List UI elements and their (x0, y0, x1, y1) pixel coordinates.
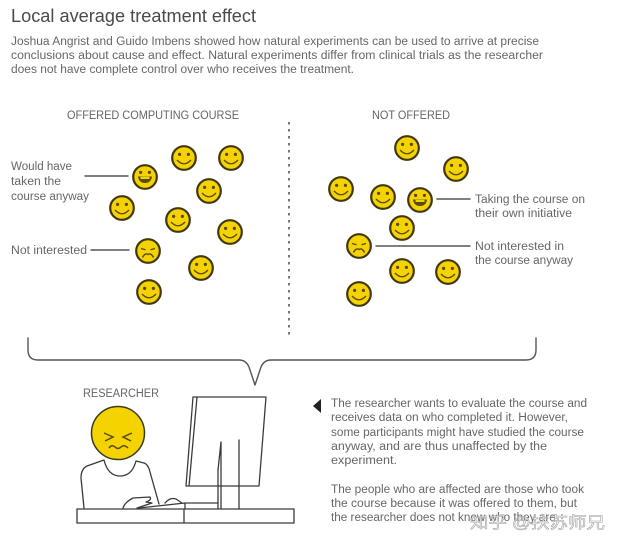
icon: unhappy face, not interested (136, 239, 160, 263)
explanation text block: The people who are affected are those who took (331, 484, 584, 496)
icon: smiling face (390, 216, 414, 240)
explanation text block: some participants might have studied the course (331, 427, 584, 439)
title: Local average treatment effect (11, 5, 256, 26)
icon: smiling face (219, 146, 243, 170)
icon: smiling face (371, 185, 395, 209)
intro text block: conclusions about cause and effect. Natural experiments differ from clinical trials as the researcher (11, 50, 543, 62)
heading: offered computing course: OFFERED COMPUTING COURSE (67, 110, 239, 122)
explanation text block: receives data on who completed it. However, (331, 412, 568, 424)
icon: unhappy face, not interested (347, 234, 371, 258)
watermark: 知乎 @扶苏师兄 (470, 514, 605, 532)
explanation text block: anyway, and are thus unaffected by the (331, 441, 547, 453)
explanation text block: experiment. (331, 455, 397, 467)
explanation text block: the researcher does not know who they are. (331, 512, 559, 524)
panel: not offered group faces (329, 136, 468, 306)
callout: taking the course on their own initiative: their own initiative (475, 208, 572, 220)
callout: not interested: Not interested (11, 245, 87, 257)
icon: smiling face (197, 179, 221, 203)
illustration: researcher at computer (77, 397, 294, 523)
explanation text block (331, 398, 587, 524)
intro text block: Joshua Angrist and Guido Imbens showed how natural experiments can be used to arrive at precise (11, 36, 539, 48)
callout: taking the course on their own initiative (437, 194, 585, 220)
icon: smiling face (166, 208, 190, 232)
icon: smiling face (444, 157, 468, 181)
callout: not interested in the course anyway (376, 241, 573, 267)
callout: would have taken the course anyway: taken the (11, 176, 61, 188)
researcher label: RESEARCHER (83, 388, 159, 400)
icon: pointer arrow (313, 399, 321, 413)
callout: would have taken the course anyway: course anyway (11, 191, 89, 203)
monitor stand (218, 440, 239, 509)
explanation text block: The researcher wants to evaluate the course and (331, 398, 587, 410)
icon: smiling face (189, 256, 213, 280)
icon: smiling face (329, 177, 353, 201)
explanation text block: the course because it was offered to them, but (331, 498, 578, 510)
desk (77, 509, 294, 523)
icon: smiling face (395, 136, 419, 160)
icon: grinning face, would have taken course (133, 165, 157, 189)
researcher body (81, 460, 159, 508)
callout: not interested in the course anyway: Not interested in (475, 241, 564, 253)
icon: smiling face (172, 146, 196, 170)
icon: grinning face, taking course anyway (408, 188, 432, 212)
icon: smiling face (110, 196, 134, 220)
callout: would have taken the course anyway: Would have (11, 161, 72, 173)
callout: taking the course on their own initiative: Taking the course on (475, 194, 585, 206)
callout: not interested (11, 245, 129, 257)
icon: smiling face (218, 220, 242, 244)
icon: researcher head (92, 406, 144, 460)
intro text block: does not have complete control over who receives the treatment. (11, 64, 354, 76)
callout: not interested in the course anyway: the course anyway (475, 255, 573, 267)
icon: smiling face (137, 280, 161, 304)
icon: smiling face (347, 282, 371, 306)
icon: smiling face (436, 260, 460, 284)
icon: smiling face (390, 259, 414, 283)
keyboard (139, 503, 218, 509)
brace joining both groups (28, 338, 536, 385)
panel: offered group faces (110, 146, 243, 304)
heading: not offered: NOT OFFERED (372, 110, 450, 122)
researcher hands (123, 497, 182, 508)
computer monitor (186, 397, 266, 486)
callout: would have taken the course anyway (11, 161, 128, 203)
intro text block (11, 36, 543, 76)
